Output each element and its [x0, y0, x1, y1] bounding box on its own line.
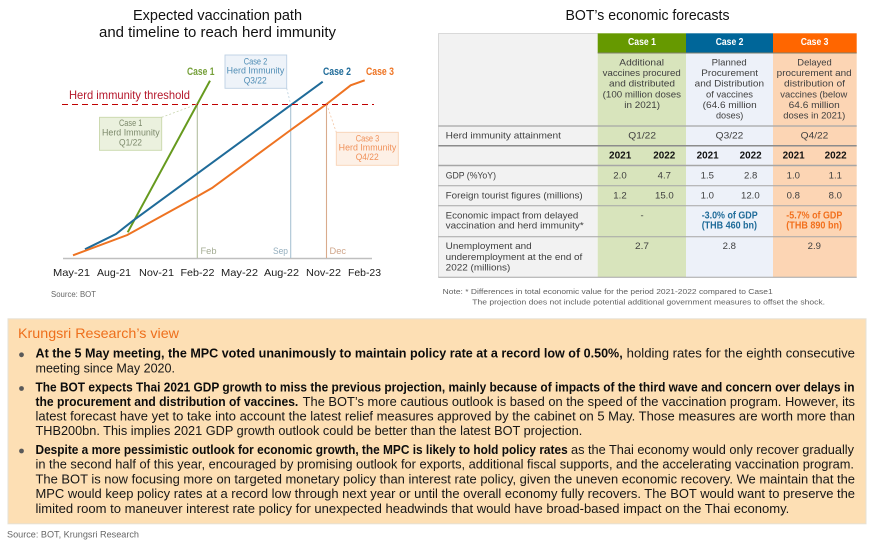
table note [443, 287, 825, 306]
case descriptions: Procurement [701, 67, 758, 78]
chart title [99, 8, 337, 41]
row: years [609, 150, 847, 162]
row: foreign tourist figures: 1.0 [701, 190, 714, 200]
header: Case 3: Case 3 [801, 37, 829, 48]
row: economic impact: -3.0% of GDP [702, 210, 758, 221]
bullet: BOT GDP expectation: The BOT’s more cautious outlook is based on the speed of the vaccination program. However, its [303, 395, 855, 409]
table note: The projection does not include potential additional government measures to offset the shock. [472, 297, 825, 306]
case descriptions: of vaccines [706, 88, 753, 99]
row: years: 2022 [740, 150, 762, 162]
label: Case 3: Case 3 [366, 66, 394, 78]
row: foreign tourist figures: 12.0 [741, 190, 760, 200]
callout: Case 1 herd immunity [100, 104, 197, 150]
bullet: MPC likely to hold rates: limited room to maneuver interest rate policy for unexpected headwinds that would have broad-based impact on the Thai economy. [36, 502, 789, 516]
row: unemployment [446, 240, 821, 272]
row: economic impact: -5.7% of GDP [786, 210, 843, 221]
bullet: MPC vote [19, 347, 855, 376]
page source: Source: BOT, Krungsri Research [7, 529, 139, 540]
panel: BOT's economic forecasts [438, 8, 857, 306]
row: herd immunity attainment: Q3/22 [716, 130, 743, 140]
callout: Case 3 herd immunity: Q4/22 [356, 152, 379, 162]
row: years: 2021 [783, 150, 805, 162]
case descriptions: (100 million doses [603, 88, 681, 99]
label: Case 1: Case 1 [187, 66, 215, 78]
line: Case 2 [85, 82, 323, 249]
header: Case 2: Case 2 [716, 37, 744, 48]
case descriptions: doses) [716, 109, 743, 120]
row: GDP: 1.5 [701, 170, 714, 180]
row: GDP: 1.0 [787, 170, 800, 180]
chart title: Expected vaccination path [133, 8, 302, 24]
row: GDP: 4.7 [658, 170, 671, 180]
panel: Krungsri Research's view [8, 319, 866, 524]
row: herd immunity attainment: Herd immunity attainment [446, 130, 561, 140]
header: Case 2 [686, 33, 773, 53]
row: economic impact: (THB 460 bn) [702, 221, 757, 232]
case descriptions: 64.6 million [789, 99, 840, 110]
case descriptions: (64.6 million [703, 99, 757, 110]
case descriptions: Planned [712, 56, 747, 68]
row: herd immunity attainment: Q1/22 [628, 130, 656, 140]
row: unemployment: Unemployment and [446, 240, 532, 251]
x axis [53, 258, 381, 279]
line: Case 1 [128, 81, 210, 232]
bullet: BOT GDP expectation: THB200bn. This implies 2021 GDP growth outlook could be better than the latest BOT projection. [36, 424, 582, 438]
x axis: Aug-22 [264, 268, 299, 279]
panel: vaccination path chart [51, 8, 398, 299]
bullet: MPC likely to hold rates [19, 443, 855, 516]
bullet: MPC likely to hold rates: Despite a more pessimistic outlook for economic growth, the MPC is likely to hold policy rates [36, 443, 568, 457]
table note: Note: * Differences in total economic value for the period 2021-2022 compared to Case1 [443, 287, 773, 296]
row: economic impact: (THB 890 bn) [786, 221, 842, 232]
bullet: MPC vote: At the 5 May meeting, the MPC voted unanimously to maintain policy rate at a record low of 0.50%, [36, 347, 623, 361]
callout: Case 3 herd immunity [327, 104, 398, 165]
case descriptions: Delayed [797, 56, 832, 68]
row: unemployment: underemployment at the end of [446, 251, 583, 262]
bullet: MPC likely to hold rates: as the Thai economy would only recover gradually [571, 443, 855, 457]
x axis: Feb-23 [348, 268, 381, 279]
row: herd immunity attainment: Q4/22 [801, 130, 828, 140]
row: unemployment: 2.7 [635, 240, 649, 251]
bullet: MPC likely to hold rates: MPC would keep policy rates at a record low through next year or until the overall economy fully recovers. The BOT would want to preserve the [36, 487, 855, 501]
marker: Dec: Dec [330, 245, 346, 256]
case descriptions: distribution of [784, 78, 845, 89]
row: GDP: 2.0 [613, 170, 627, 180]
row: GDP [446, 170, 842, 180]
herd immunity threshold line [62, 104, 374, 106]
row: foreign tourist figures: 15.0 [655, 190, 674, 200]
row rules [438, 53, 857, 277]
row: unemployment: 2.9 [808, 240, 821, 251]
callout: Case 2 herd immunity: Herd Immunity [227, 66, 285, 76]
label: herd immunity threshold: Herd immunity threshold [69, 89, 190, 102]
row: unemployment: 2.8 [723, 240, 736, 251]
row: GDP: 1.1 [829, 170, 842, 180]
chart title: and timeline to reach herd immunity [99, 25, 337, 41]
bullet: MPC likely to hold rates: The BOT is now focusing more on targeted monetary policy than interest rate policy, given the uneven economic recovery. We maintain that the [36, 472, 855, 486]
x axis: May-22 [221, 268, 258, 279]
case descriptions: and Distribution [695, 78, 764, 89]
case descriptions [603, 56, 852, 120]
label: Case 2: Case 2 [323, 66, 351, 78]
bullet: BOT GDP expectation: the procurement and distribution of vaccines. [36, 395, 298, 409]
header: Case 3 [773, 33, 857, 53]
callout: Case 2 herd immunity [225, 55, 291, 104]
row: unemployment: 2022 (millions) [446, 261, 510, 272]
table title: BOT’s economic forecasts [566, 8, 730, 24]
x axis: Nov-21 [139, 268, 174, 279]
row: years: 2021 [697, 150, 719, 162]
row: GDP: 2.8 [744, 170, 757, 180]
row: foreign tourist figures: 1.2 [613, 190, 627, 200]
chart source: Source: BOT [51, 290, 96, 299]
bullet: MPC likely to hold rates: in the second half of this year, encouraged by promising outlook for exports, additional fiscal supports, and the accelerating vaccination program. [36, 458, 854, 472]
row: economic impact: vaccination and herd immunity* [446, 220, 584, 231]
case descriptions: doses in 2021) [783, 109, 845, 120]
row: GDP: GDP (%YoY) [446, 170, 496, 180]
callout: Case 1 herd immunity: Q1/22 [119, 137, 142, 147]
case descriptions: in 2021) [624, 99, 660, 110]
header: Case 1: Case 1 [628, 37, 656, 48]
bullet: BOT GDP expectation [19, 380, 855, 438]
row: economic impact: Economic impact from delayed [446, 209, 578, 220]
callout: Case 3 herd immunity: Herd Immunity [339, 142, 397, 152]
x axis: Feb-22 [180, 268, 215, 279]
line: Case 3 [73, 80, 365, 255]
callout: Case 2 herd immunity: Q3/22 [244, 75, 267, 85]
case descriptions: vaccines procured [603, 67, 681, 78]
table background columns [438, 33, 857, 277]
row: years: 2021 [609, 150, 632, 162]
callout: Case 1 herd immunity: Case 1 [119, 118, 142, 128]
row: years: 2022 [825, 150, 847, 162]
bullet: MPC vote: holding rates for the eighth consecutive [627, 347, 855, 361]
panel heading: Krungsri Research’s view [18, 326, 179, 341]
panel background [8, 319, 866, 524]
marker: Feb: Feb [200, 245, 216, 256]
bullet: MPC vote: meeting since May 2020. [36, 362, 175, 376]
case descriptions: vaccines (below [780, 88, 848, 99]
x axis: May-21 [53, 268, 90, 279]
row: foreign tourist figures: Foreign tourist figures (millions) [446, 190, 583, 200]
case descriptions: Additional [619, 56, 664, 68]
row: foreign tourist figures [446, 190, 842, 200]
bullet: BOT GDP expectation: latest forecast have yet to take into account the latest relief measures approved by the cabinet on 5 May. Those measures are worth more than [36, 409, 855, 423]
marker: Sep: Sep [273, 245, 288, 256]
row: herd immunity attainment [446, 130, 828, 140]
case descriptions: and distributed [609, 78, 675, 89]
callout: Case 1 herd immunity: Herd Immunity [102, 128, 160, 138]
row: foreign tourist figures: 8.0 [829, 190, 842, 200]
callout: Case 3 herd immunity: Case 3 [356, 133, 379, 143]
row: economic impact [446, 209, 843, 232]
case descriptions: procurement and [777, 67, 852, 78]
header: Case 1 [598, 33, 686, 53]
row: economic impact: - [640, 209, 644, 220]
row: years: 2022 [653, 150, 676, 162]
callout: Case 2 herd immunity: Case 2 [244, 56, 267, 66]
row: foreign tourist figures: 0.8 [787, 190, 800, 200]
x axis: Aug-21 [97, 268, 131, 279]
x axis: Nov-22 [306, 268, 341, 279]
